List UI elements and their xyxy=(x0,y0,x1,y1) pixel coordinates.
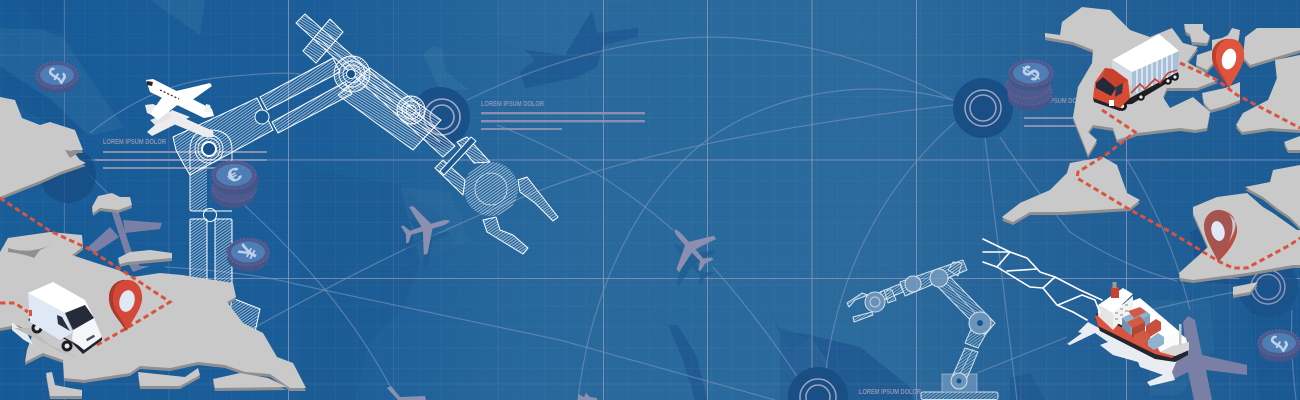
truck cab xyxy=(1093,68,1130,111)
elbow joint xyxy=(334,56,370,92)
island: mid xyxy=(1196,50,1214,70)
peninsula by pin xyxy=(1202,82,1240,110)
route node circles xyxy=(40,78,1298,400)
delivery van xyxy=(14,282,102,358)
landmass: lower right main xyxy=(1179,193,1300,280)
island: right edge xyxy=(1284,136,1300,150)
landmass: south america xyxy=(1002,157,1140,222)
dashed route left xyxy=(0,198,170,346)
dollar coin stack: $ xyxy=(1016,60,1046,86)
island: upper xyxy=(1184,24,1210,43)
island: lower bits xyxy=(46,372,82,396)
landmass: north america xyxy=(1045,7,1218,155)
island: by pin xyxy=(1212,28,1240,50)
text block centre: LOREM IPSUM DOLOR xyxy=(481,99,545,108)
base columns xyxy=(190,162,260,332)
island: south middle xyxy=(138,368,200,386)
white airplane upper xyxy=(146,79,214,120)
small airplane centre left xyxy=(396,197,457,271)
euro coin stack xyxy=(211,161,259,208)
truck wheels xyxy=(1117,73,1179,111)
pound coin right xyxy=(1258,330,1300,362)
map: left continents xyxy=(0,97,306,396)
van wheels xyxy=(32,322,72,352)
column xyxy=(952,325,987,378)
landmass: lower right north xyxy=(1245,165,1300,227)
container truck xyxy=(1093,34,1179,111)
map: right continents xyxy=(1002,7,1300,295)
text block right xyxy=(1024,96,1090,127)
airplane bottom edge left xyxy=(387,386,426,400)
fingers xyxy=(847,290,896,322)
yen coin: ¥ xyxy=(233,240,264,264)
hull xyxy=(1095,298,1189,362)
pound coin left: £ xyxy=(42,63,72,88)
dollar coin stack xyxy=(1006,60,1053,111)
landmass: europe right xyxy=(1236,55,1300,132)
gripper xyxy=(435,137,558,254)
superstructure xyxy=(1098,282,1133,330)
landmass: top left xyxy=(0,97,86,197)
small airplane centre xyxy=(656,213,725,296)
ship wake lines xyxy=(983,239,1102,320)
text block left: LOREM IPSUM DOLOR xyxy=(103,137,167,146)
forearm xyxy=(296,14,455,157)
left coast detail xyxy=(8,150,80,345)
cargo ship xyxy=(1067,282,1189,386)
white airplane lower xyxy=(145,104,214,137)
shoulder joint xyxy=(190,130,232,170)
white airplanes xyxy=(145,79,214,137)
base xyxy=(921,374,998,400)
location pin left xyxy=(109,280,142,331)
ship shadow xyxy=(1067,322,1177,386)
airplane bottom edge centre xyxy=(578,393,597,400)
large airplane left xyxy=(87,210,162,272)
robotic arm left xyxy=(173,14,558,332)
landmass: main left xyxy=(0,232,306,388)
pound coin right: £ xyxy=(1264,331,1294,356)
island: small top xyxy=(92,193,132,213)
dashed route right lower xyxy=(1077,110,1300,268)
joints xyxy=(865,269,991,389)
arm xyxy=(880,260,995,335)
island: long xyxy=(118,250,172,264)
landmass: greenland right xyxy=(1243,28,1300,65)
island: south east xyxy=(213,373,287,388)
robotic arm right xyxy=(847,260,998,400)
pound coin left xyxy=(36,62,78,93)
upper arm xyxy=(173,58,352,175)
large airplane right xyxy=(1172,316,1247,400)
text block right: LOREM IPSUM DOLOR xyxy=(1026,96,1090,105)
containers xyxy=(1122,307,1164,350)
dashed route right upper xyxy=(1180,63,1300,128)
wrist joint xyxy=(397,96,425,124)
location pin upper right xyxy=(1212,39,1244,89)
text block bottom: LOREM IPSUM DOLOR xyxy=(859,387,922,396)
yen coin xyxy=(227,238,269,272)
island: lower small xyxy=(1233,282,1258,295)
euro coin stack: € xyxy=(223,162,245,188)
location pin lower right xyxy=(1204,210,1237,262)
